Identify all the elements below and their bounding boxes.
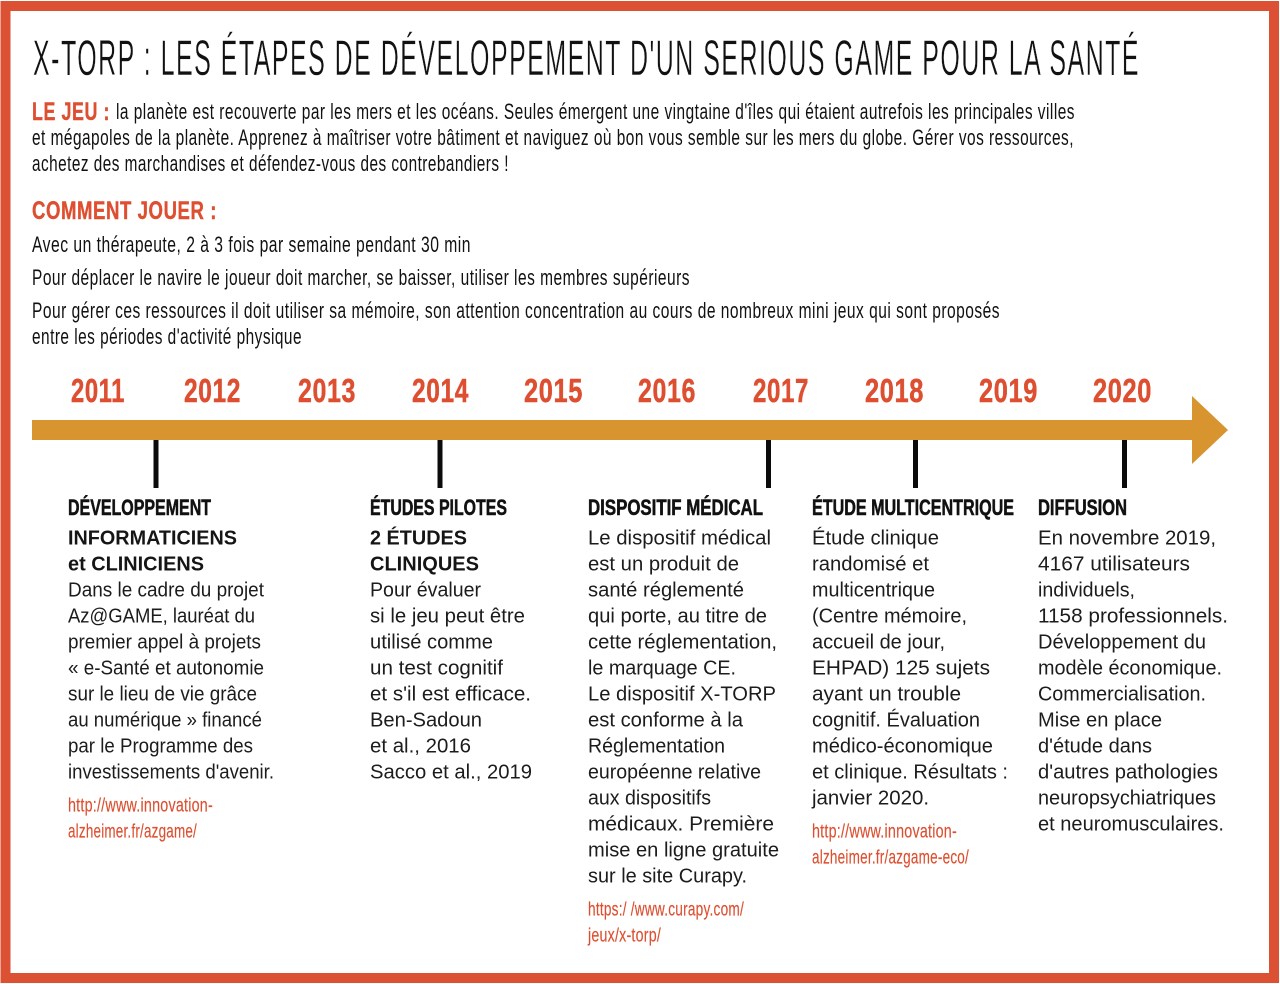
milestone: études pilotes [370,495,532,783]
description: le marquage CE. [588,657,736,679]
description: si le jeu peut être [370,605,525,627]
link [68,796,213,842]
subheading [68,527,237,575]
milestone: étude multicentrique [811,495,1014,868]
text block: comment jouer: entre les périodes d'activité physique [32,324,302,349]
description: aux dispositifs [588,787,711,809]
description: est un produit de [588,553,739,575]
description: santé réglementé [588,579,744,601]
description: un test cognitif [370,657,503,679]
description: européenne relative [588,761,761,783]
subheading: INFORMATICIENS [68,527,237,549]
description: sur le site Curapy. [588,865,747,887]
timeline years: 2015 [524,372,583,409]
heading: ÉTUDES PILOTES [370,495,507,520]
description: janvier 2020. [811,787,929,809]
milestone: développement [68,495,274,842]
description: Sacco et al., 2019 [370,761,532,783]
description: Le dispositif X-TORP [588,683,776,705]
link: http://www.innovation- [812,822,957,842]
timeline years: 2014 [412,372,469,409]
description: et al., 2016 [370,735,471,757]
link: jeux/x-torp/ [587,926,661,946]
description: investissements d'avenir. [68,761,274,783]
description: et s'il est efficace. [370,683,531,705]
heading: DISPOSITIF MÉDICAL [588,495,763,520]
timeline years: 2011 [71,372,125,409]
description: En novembre 2019, [1038,527,1216,549]
subheading: 2 ÉTUDES [370,526,467,549]
text block: le jeu [32,98,1075,176]
description: médico-économique [812,735,993,757]
link: alzheimer.fr/azgame-eco/ [812,848,969,868]
link [587,900,744,946]
description: qui porte, au titre de [588,605,767,627]
description: au numérique » financé [68,709,262,731]
heading: comment jouer: COMMENT JOUER : [32,197,217,225]
description: ayant un trouble [812,683,961,705]
description: « e-Santé et autonomie [68,657,264,679]
subheading: CLINIQUES [370,553,479,575]
description [370,579,532,783]
text block: comment jouer: Pour déplacer le navire le joueur doit marcher, se baisser, utiliser les membres supérieurs [32,265,690,290]
description: et clinique. Résultats : [812,761,1008,783]
description [68,579,274,783]
description: Dans le cadre du projet [68,579,264,601]
link: https:/ /www.curapy.com/ [588,900,744,920]
heading: ÉTUDE MULTICENTRIQUE [812,495,1014,520]
link [812,822,969,868]
description: cette réglementation, [588,631,777,653]
description: Commercialisation. [1038,683,1206,705]
description: Étude clinique [812,526,939,549]
timeline years: 2013 [298,372,356,409]
description: d'étude dans [1038,735,1152,757]
timeline years: 2019 [979,372,1038,409]
description: EHPAD) 125 sujets [812,657,990,679]
text block: le jeu: achetez des marchandises et défendez-vous des contrebandiers ! [32,151,509,176]
text block: comment jouer [32,232,1000,349]
description: premier appel à projets [68,631,261,653]
subheading: et CLINICIENS [68,553,204,575]
description: par le Programme des [68,735,253,757]
description: randomisé et [812,553,929,575]
description [811,526,1008,809]
description: sur le lieu de vie grâce [68,683,257,705]
description [588,527,779,887]
description: Le dispositif médical [588,527,771,549]
description: 1158 professionnels. [1038,605,1228,627]
text block: comment jouer: Avec un thérapeute, 2 à 3 fois par semaine pendant 30 min [32,232,471,257]
text block: le jeu: LE JEU : [32,98,110,126]
milestone: dispositif médical [587,495,779,946]
description: neuropsychiatriques [1038,787,1216,809]
description: multicentrique [812,579,935,601]
description: médicaux. Première [588,813,774,835]
timeline years: 2012 [184,372,241,409]
description: (Centre mémoire, [812,605,967,627]
heading: DIFFUSION [1038,495,1127,520]
description: et neuromusculaires. [1038,813,1224,835]
milestone: diffusion [1038,495,1228,835]
description: Pour évaluer [370,579,481,601]
description: cognitif. Évaluation [812,708,980,731]
timeline years [71,372,1152,409]
description: est conforme à la [588,709,744,731]
link: alzheimer.fr/azgame/ [68,822,197,842]
description: Ben-Sadoun [370,709,482,731]
description: Mise en place [1038,709,1162,731]
timeline years: 2016 [638,372,696,409]
description: Réglementation [588,735,725,757]
timeline years: 2018 [865,372,924,409]
subheading [370,526,479,575]
description [1038,527,1228,835]
description: Développement du [1038,631,1206,653]
link: http://www.innovation- [68,796,213,816]
arrow: timeline [32,396,1228,464]
heading: DÉVELOPPEMENT [68,495,211,520]
description: mise en ligne gratuite [588,839,779,861]
description: Az@GAME, lauréat du [68,605,255,627]
description: 4167 utilisateurs [1038,553,1190,575]
timeline years: 2017 [753,372,809,409]
description: modèle économique. [1038,657,1222,679]
description: individuels, [1038,579,1135,601]
description: accueil de jour, [812,631,945,653]
description: utilisé comme [370,631,493,653]
timeline years: 2020 [1093,372,1152,409]
timeline tick marks [154,440,1127,488]
description: d'autres pathologies [1038,761,1218,783]
